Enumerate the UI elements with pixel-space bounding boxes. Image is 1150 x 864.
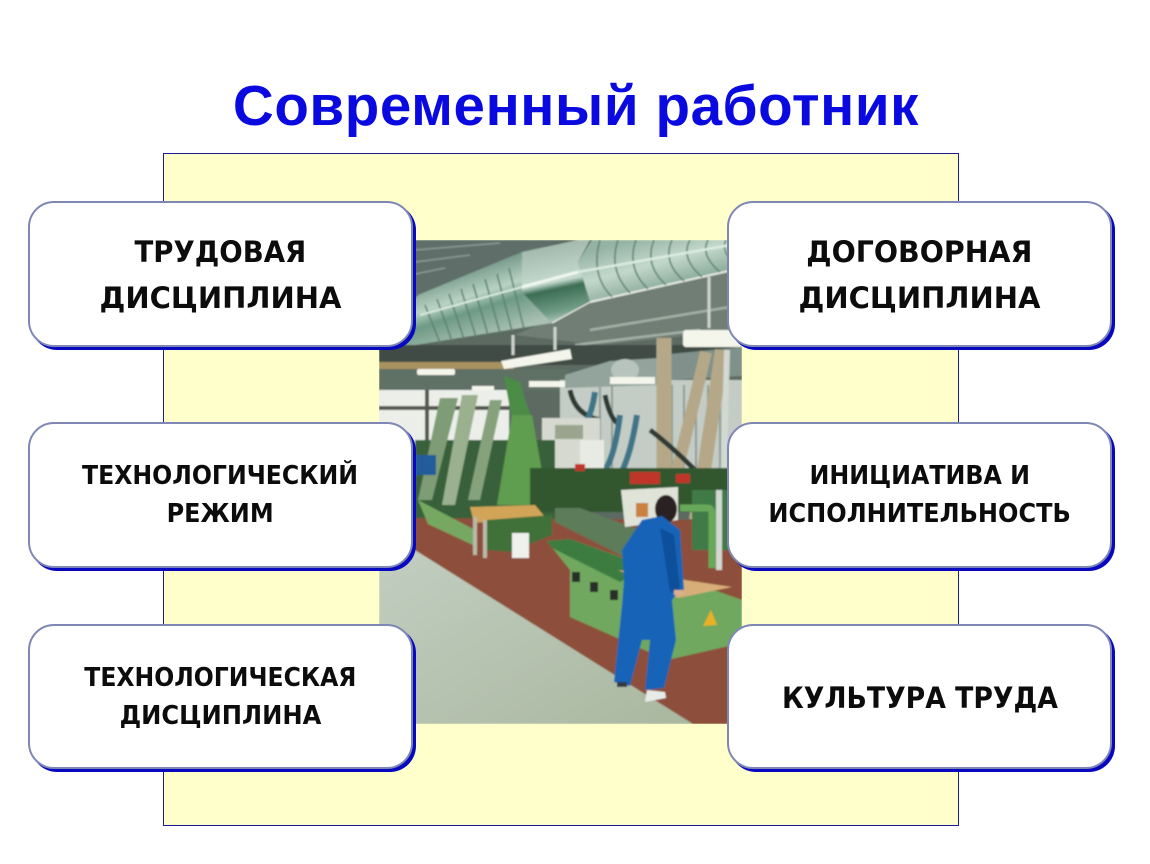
green machinery (415, 440, 555, 520)
card: технологическая дисциплина: ТЕХНОЛОГИЧЕСКАЯ (84, 663, 357, 693)
conveyor left (418, 500, 475, 546)
card: договорная дисциплина: ДИСЦИПЛИНА (799, 281, 1040, 315)
card: трудовая дисциплина: ДИСЦИПЛИНА (100, 281, 341, 315)
control box (621, 487, 678, 527)
wood beam and back wall (379, 362, 514, 369)
conveyor right (555, 508, 640, 560)
card: технологическая дисциплина: ДИСЦИПЛИНА (120, 701, 321, 731)
worker at left (416, 455, 436, 475)
floors (379, 518, 742, 724)
ceiling (379, 240, 560, 320)
dark and blue hoses (570, 390, 695, 470)
round vent (565, 358, 660, 388)
card: технологический режим: РЕЖИМ (167, 499, 274, 529)
beige hoses (664, 338, 722, 520)
card: культура труда (727, 624, 1112, 769)
photo: modern factory worker at woodworking line (379, 240, 742, 724)
windows (379, 390, 509, 478)
card: трудовая дисциплина (28, 201, 413, 347)
green pipe (692, 490, 742, 550)
card: инициатива и исполнительность: ИНИЦИАТИВА И (809, 461, 1030, 491)
card: договорная дисциплина: ДОГОВОРНАЯ (806, 235, 1033, 269)
worker (655, 495, 677, 523)
card: договорная дисциплина (727, 201, 1112, 347)
card: технологический режим (28, 422, 413, 568)
card: технологическая дисциплина (28, 624, 413, 769)
card: культура труда: КУЛЬТУРА ТРУДА (782, 681, 1057, 715)
title: Современный работник (233, 74, 919, 137)
white machine (542, 418, 600, 468)
card: технологический режим: ТЕХНОЛОГИЧЕСКИЙ (82, 461, 359, 491)
card: инициатива и исполнительность (727, 422, 1112, 568)
bucket (512, 533, 529, 558)
panel: pale yellow background (163, 153, 959, 826)
lamps (417, 330, 743, 390)
card: инициатива и исполнительность: ИСПОЛНИТЕЛЬНОСТЬ (768, 499, 1071, 529)
card: трудовая дисциплина: ТРУДОВАЯ (135, 235, 306, 269)
ducts (379, 252, 552, 345)
